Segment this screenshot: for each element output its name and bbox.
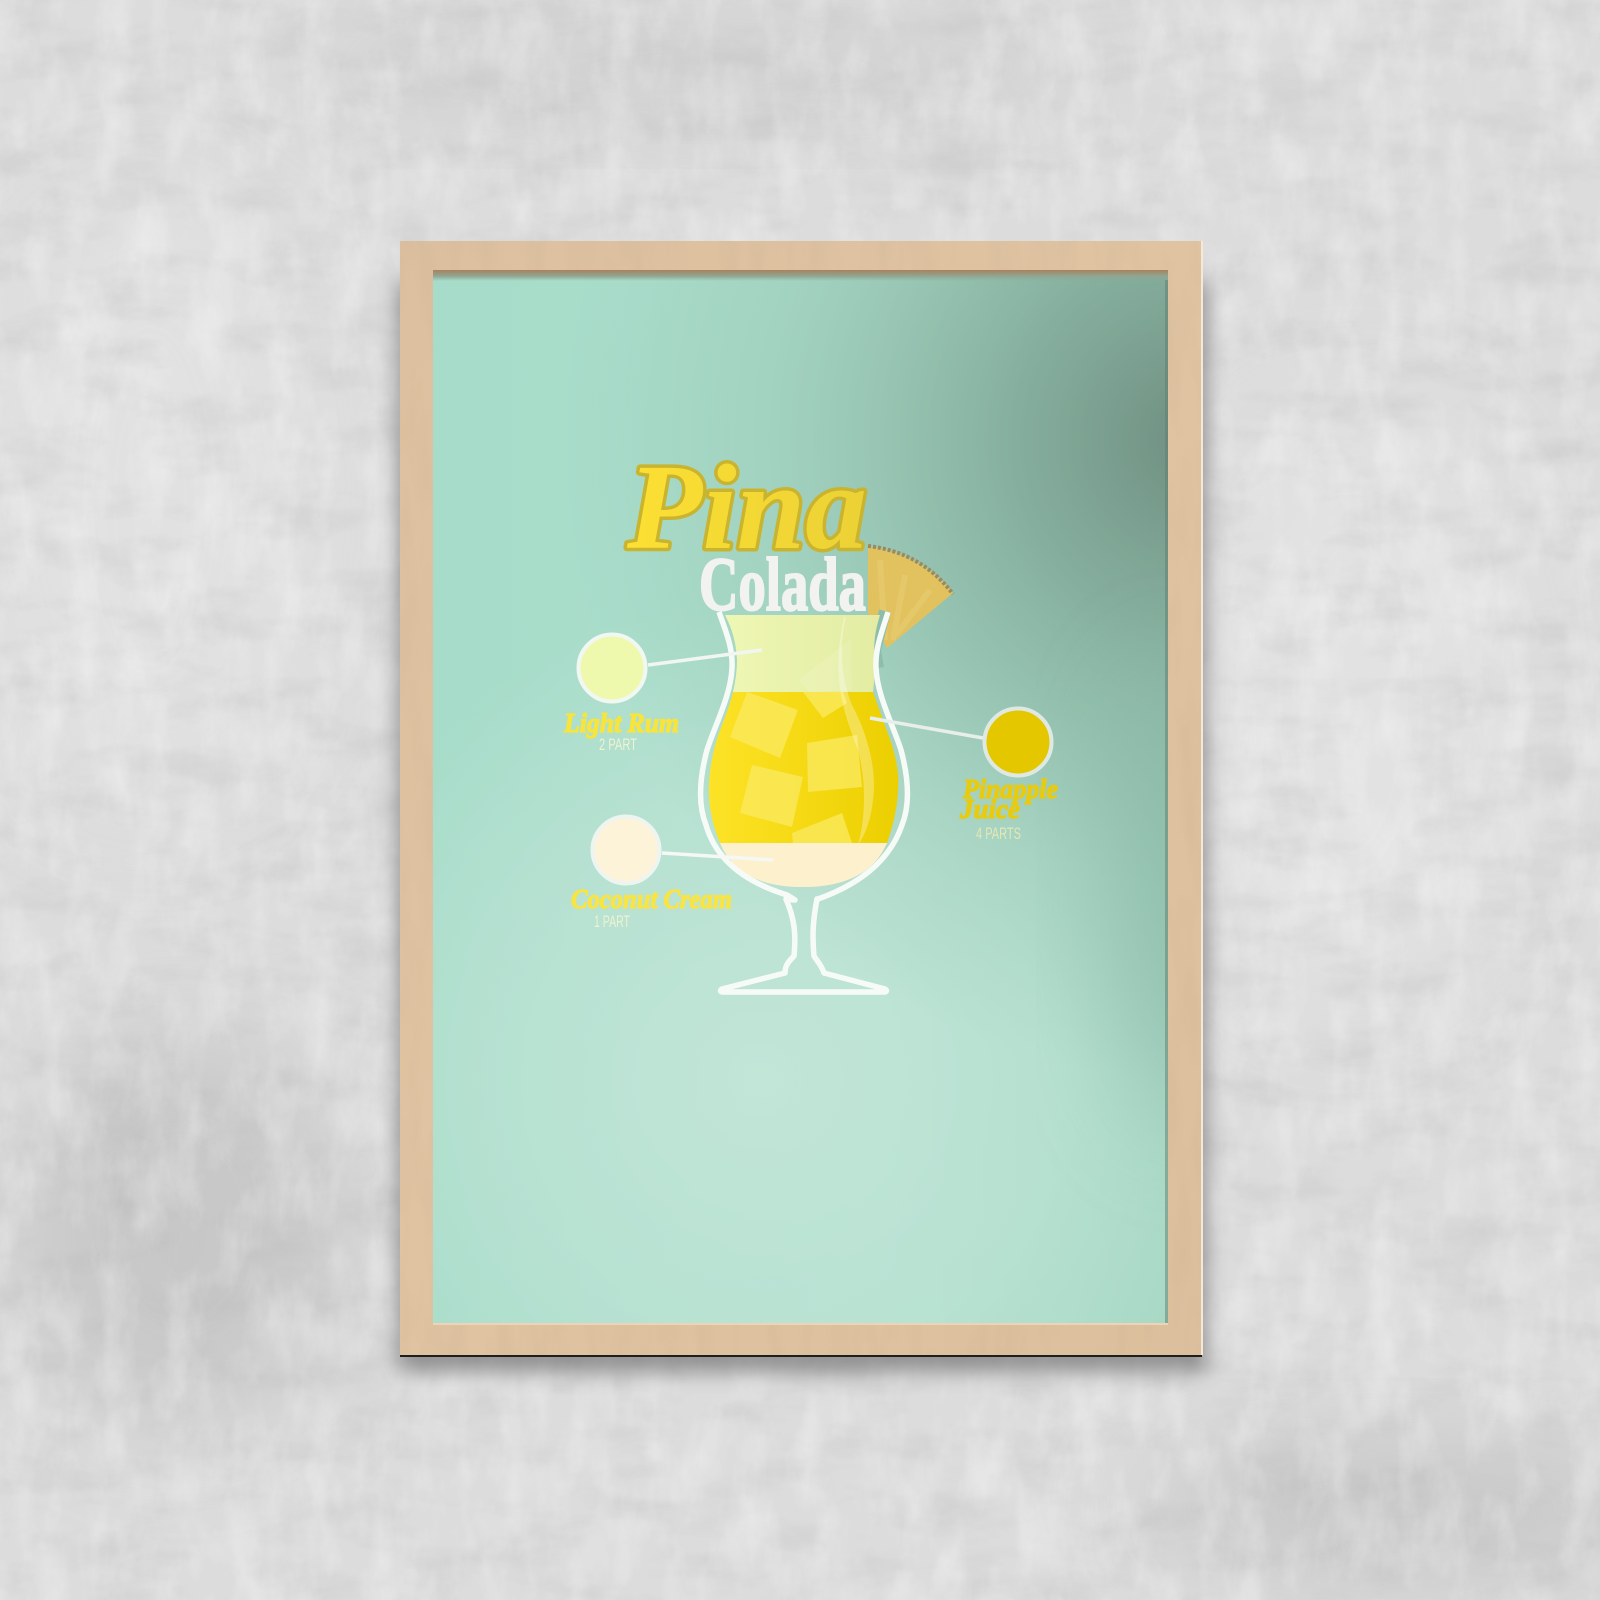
poster panel	[433, 270, 1168, 1323]
label line two: Juice	[959, 794, 1020, 824]
swatch	[592, 816, 660, 884]
glass outline	[700, 612, 908, 992]
leader line	[662, 853, 773, 860]
layer: light rum	[725, 615, 880, 692]
layer: coconut cream	[720, 843, 887, 887]
ice cubes	[730, 692, 862, 843]
glass highlight	[838, 617, 874, 845]
leader line	[870, 718, 983, 738]
label: Coconut Cream	[571, 884, 732, 914]
parts: 4 PARTS	[976, 824, 1021, 843]
cocktail glass	[700, 611, 908, 992]
label: Light Rum	[563, 708, 679, 738]
title: Pina: Pina	[626, 440, 867, 575]
title: Colada: Colada	[699, 543, 866, 627]
swatch	[984, 708, 1052, 776]
glass rim gap	[875, 611, 885, 668]
ingredient: light rum	[563, 634, 762, 754]
parts: 1 PART	[594, 912, 630, 931]
swatch	[578, 634, 646, 702]
label: Pinapple	[962, 774, 1058, 804]
icon: pineapple wedge garnish	[868, 546, 953, 648]
ingredient: pineapple juice	[870, 708, 1058, 843]
leader line	[648, 650, 762, 665]
wooden frame	[400, 241, 1203, 1357]
parts: 2 PART	[599, 735, 637, 754]
ingredient: coconut cream	[571, 816, 773, 931]
frame shadow	[398, 280, 1206, 1372]
layer: pineapple juice	[709, 692, 898, 843]
